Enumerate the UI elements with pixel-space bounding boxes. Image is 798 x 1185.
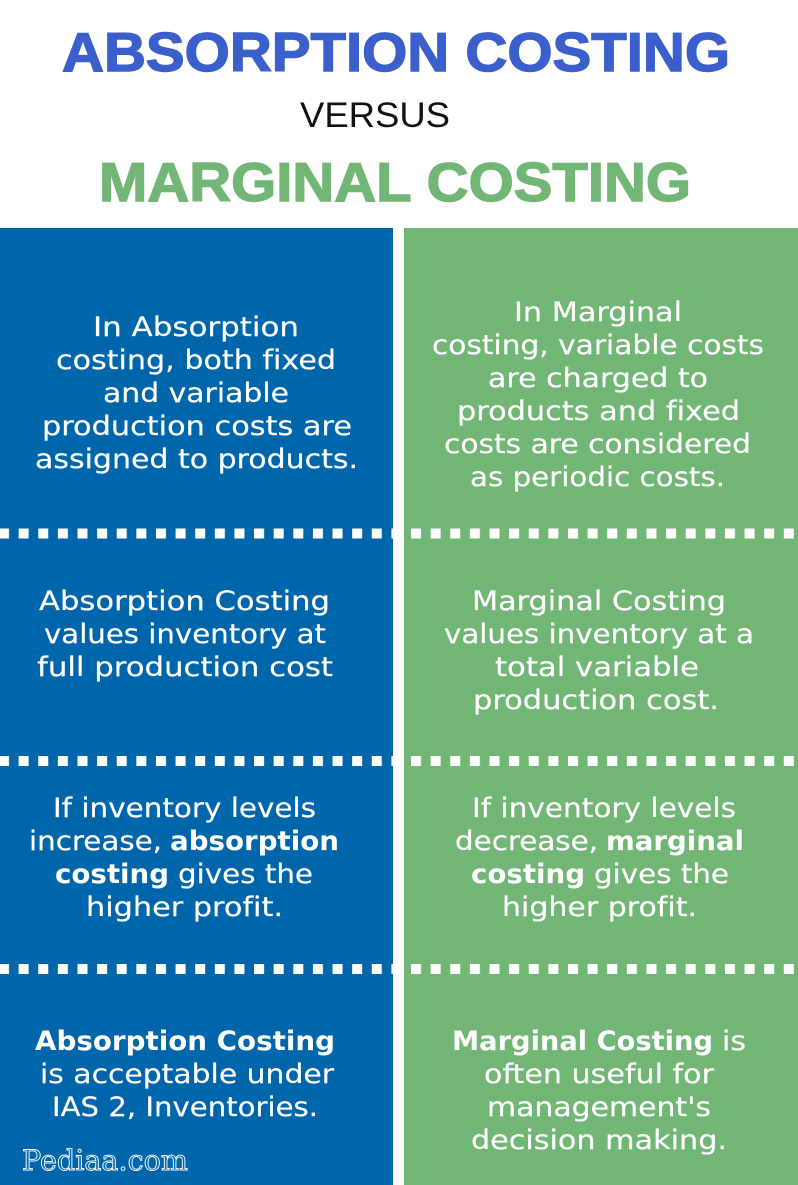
title: absorption costing: ABSORPTION COSTING — [62, 21, 730, 83]
text: marginal row 1: are charged to — [488, 363, 708, 394]
text: marginal row 1: costing, variable costs — [432, 330, 764, 361]
text: absorption row 3: absorption — [170, 826, 339, 857]
text: marginal row 3: decrease, — [455, 826, 598, 857]
panel: marginal costing column — [404, 228, 798, 1185]
text: marginal row 2 — [444, 586, 754, 716]
text: marginal row 1: products and fixed — [457, 396, 740, 427]
text: absorption row 1: In Absorption — [93, 312, 299, 343]
text: marginal row 2: values inventory at a — [444, 619, 754, 650]
text: absorption row 1: costing, both fixed — [56, 345, 336, 376]
text: marginal row 4: Marginal Costing — [452, 1026, 713, 1057]
title: marginal costing: MARGINAL COSTING — [99, 151, 691, 213]
text: marginal row 3: If inventory levels — [472, 793, 736, 824]
text: marginal row 2: total variable — [495, 652, 699, 683]
text: marginal row 1: In Marginal — [514, 297, 682, 328]
text: marginal row 1: costs are considered — [444, 429, 751, 460]
text: marginal row 4: is — [722, 1026, 746, 1057]
text: absorption row 3 — [29, 793, 339, 923]
text: marginal row 3: costing — [471, 859, 585, 890]
text: absorption row 2: full production cost — [37, 652, 333, 683]
text: absorption row 2: Absorption Costing — [39, 586, 330, 617]
text: absorption row 3: higher profit. — [86, 892, 283, 923]
text: marginal row 3: gives the — [594, 859, 729, 890]
text: absorption row 2 — [37, 586, 333, 683]
text: absorption row 3: gives the — [178, 859, 313, 890]
text: marginal row 2: Marginal Costing — [472, 586, 726, 617]
text: absorption row 1: production costs are — [42, 411, 352, 442]
text: marginal row 4: decision making. — [471, 1125, 727, 1156]
text: marginal row 3: marginal — [606, 826, 744, 857]
text: marginal row 4 — [452, 1026, 746, 1156]
subtitle: versus: VERSUS — [300, 96, 450, 135]
text: marginal row 3: higher profit. — [502, 892, 697, 923]
text: absorption row 1: assigned to products. — [35, 444, 358, 475]
text: absorption row 4 — [35, 1026, 335, 1123]
text: absorption row 4: IAS 2, Inventories. — [52, 1092, 318, 1123]
text: absorption row 4: Absorption Costing — [35, 1026, 335, 1057]
text: marginal row 2: production cost. — [473, 685, 719, 716]
text: absorption row 4: is acceptable under — [40, 1059, 335, 1090]
text: absorption row 3: If inventory levels — [53, 793, 316, 824]
text: marginal row 4: often useful for — [484, 1059, 715, 1090]
text: absorption row 1 — [35, 312, 358, 475]
text: absorption row 3: costing — [55, 859, 169, 890]
text: marginal row 1: as periodic costs. — [470, 462, 725, 493]
text: marginal row 1 — [432, 297, 764, 493]
text: marginal row 3 — [455, 793, 744, 923]
text: absorption row 2: values inventory at — [44, 619, 326, 650]
text: absorption row 1: and variable — [103, 378, 289, 409]
text: marginal row 4: management's — [487, 1092, 711, 1123]
logo: Pediaa.com: Pediaa.com — [22, 1144, 188, 1177]
text: absorption row 3: increase, — [29, 826, 162, 857]
panel: absorption costing column — [0, 228, 393, 1185]
